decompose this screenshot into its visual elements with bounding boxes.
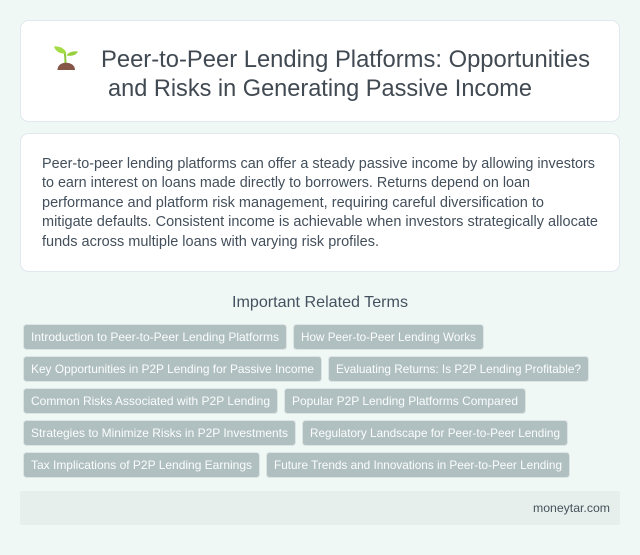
- panel: tags: [24, 324, 588, 478]
- tag: [24, 324, 286, 350]
- tag: Tax Implications of P2P Lending Earnings: [31, 458, 252, 472]
- title: [101, 46, 590, 102]
- tag: Key Opportunities in P2P Lending for Passive Income: [31, 362, 314, 376]
- summary text: funds across multiple loans with varying risk profiles.: [42, 234, 379, 250]
- tag: Introduction to Peer-to-Peer Lending Platforms: [31, 330, 279, 344]
- tag: Evaluating Returns: Is P2P Lending Profitable?: [336, 362, 581, 376]
- summary text: [42, 156, 598, 250]
- tag: [24, 356, 322, 382]
- tag: [302, 420, 568, 446]
- tag: [328, 356, 588, 382]
- tag: [24, 420, 296, 446]
- footer: moneytar.com: [533, 501, 610, 515]
- tag: [24, 388, 278, 414]
- tag: Common Risks Associated with P2P Lending: [31, 394, 270, 408]
- tag: Popular P2P Lending Platforms Compared: [292, 394, 518, 408]
- tag: Regulatory Landscape for Peer-to-Peer Lending: [310, 426, 560, 440]
- panel: summary: [20, 134, 620, 272]
- title: and Risks in Generating Passive Income: [108, 75, 532, 102]
- tag: Strategies to Minimize Risks in P2P Investments: [31, 426, 288, 440]
- summary text: mitigate defaults. Consistent income is achievable when investors strategically allocate: [42, 214, 598, 230]
- summary text: to earn interest on loans made directly to borrowers. Returns depend on loan: [42, 175, 530, 191]
- tag: [24, 452, 260, 478]
- title: Peer-to-Peer Lending Platforms: Opportunities: [101, 46, 590, 73]
- tag: How Peer-to-Peer Lending Works: [301, 330, 476, 344]
- summary text: performance and platform risk management, requiring careful diversification to: [42, 195, 544, 211]
- footer: [20, 491, 620, 525]
- icon: seedling: [54, 46, 78, 70]
- tag: [284, 388, 526, 414]
- tag: Future Trends and Innovations in Peer-to-Peer Lending: [274, 458, 562, 472]
- panel: title card: [20, 20, 620, 122]
- heading: related terms: Important Related Terms: [232, 294, 408, 311]
- summary text: Peer-to-peer lending platforms can offer a steady passive income by allowing investors: [42, 156, 595, 172]
- tag: [266, 452, 570, 478]
- tag: [294, 324, 484, 350]
